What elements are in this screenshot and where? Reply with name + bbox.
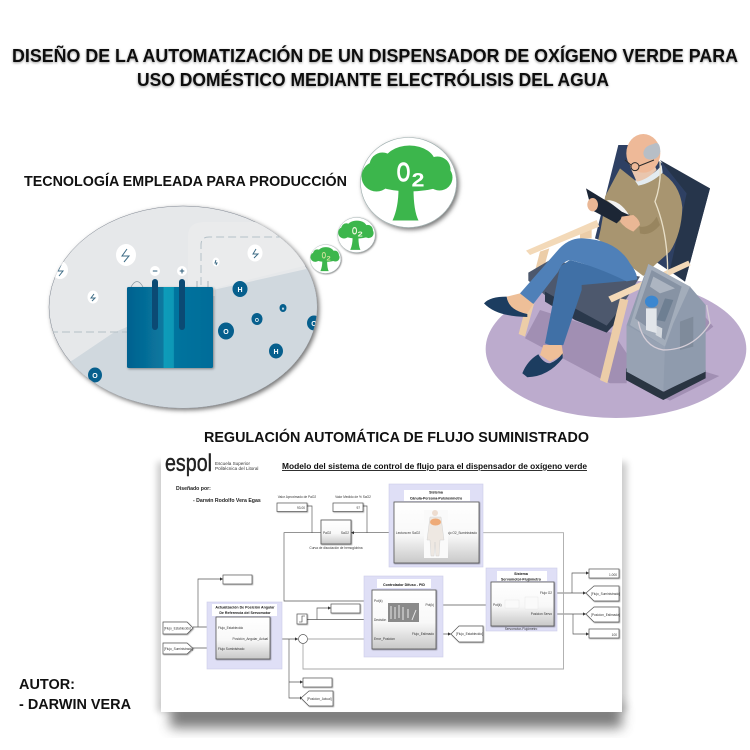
title (12, 45, 738, 90)
pants: upper leg (520, 238, 637, 304)
display blocks: 100 (612, 633, 617, 637)
from and goto tags: [Posicion_Estimada] (591, 613, 620, 617)
oxygen tube (655, 162, 668, 277)
icon: medium oxygen tree (338, 217, 375, 253)
feet (507, 293, 533, 313)
molecules: H (237, 287, 243, 294)
block: actualización de posición angular (207, 602, 282, 669)
lower background (70, 269, 317, 408)
block: actualización de posición angular: De Referencia del Servomotor (219, 611, 271, 615)
author: - DARWIN VERA (19, 697, 132, 713)
block: sistema servomotor-flujómetro: Pot(k) (493, 603, 502, 607)
block: actualización de posición angular: Posición_Angular_Actual (233, 637, 268, 641)
molecules: O (223, 329, 229, 336)
molecules (88, 281, 321, 382)
from and goto tags: [Flujo_Suministrado] (164, 647, 193, 651)
pants: lower leg (545, 260, 637, 346)
block: controlador difuso: Flujo_Estimado (412, 632, 434, 636)
block: actualización de posición angular: Actualización De Posición Angular (215, 606, 275, 610)
author: AUTOR: (19, 677, 75, 693)
far armrest and legs (580, 227, 592, 238)
purple floor (486, 280, 746, 418)
display blocks: Valor Medido de % SaO2 (335, 495, 371, 499)
arrowheads (213, 531, 589, 700)
from and goto tags: [Posicion_Actual] (307, 697, 332, 701)
logo: espol: espol (165, 450, 212, 477)
sweater arm shadow (639, 217, 660, 234)
author note: - Darwin Rodolfo Vera Egas (193, 498, 261, 504)
author (19, 677, 132, 713)
heading: tecnología: TECNOLOGÍA EMPLEADA PARA PRODUCCIÓN (24, 172, 347, 190)
display blocks: 97 (356, 506, 360, 510)
block: controlador difuso: Pot(k) (374, 599, 383, 603)
icon: small oxygen tree: 2 (326, 255, 331, 262)
from and goto tags: [Flujo_Establecido] (456, 632, 483, 636)
step source and sum (297, 614, 308, 644)
block: actualización de posición angular: Flujo Suministrado (218, 647, 245, 651)
shadow behind diagram (157, 462, 627, 728)
icon: human body (424, 510, 448, 558)
molecules: O (255, 318, 259, 324)
block: sistema servomotor-flujómetro: Sistema (514, 572, 529, 576)
block: curva de disociación: PaO2 (323, 531, 331, 535)
concentrator (626, 368, 706, 400)
icon: small oxygen tree: O (322, 251, 326, 261)
block: curva de disociación (309, 520, 363, 550)
block: actualización de posición angular: Flujo_Establecido (218, 626, 243, 630)
from and goto tags: [Flujo_Establecido] (164, 626, 191, 630)
block: controlador difuso: Error_Posicion (374, 637, 395, 641)
block: sistema cánula-persona-pulsioxímetro: Cánula-Persona-Pulsioxímetro (410, 496, 463, 500)
near armrest (608, 261, 691, 302)
block: sistema cánula-persona-pulsioxímetro: Flujo O2_Suministrado (445, 531, 477, 535)
molecules: H (282, 307, 285, 311)
from and goto tags: [Flujo_Suministrado] (591, 592, 620, 596)
block: curva de disociación: SaO2 (341, 531, 349, 535)
icon: large oxygen tree: 2 (412, 170, 424, 192)
from and goto tags (163, 586, 620, 706)
head and neck (635, 165, 663, 186)
icon: small oxygen tree (310, 245, 341, 273)
icon: large oxygen tree (360, 138, 456, 228)
display blocks: 93.00 (297, 506, 305, 510)
block: sistema cánula-persona-pulsioxímetro: Lectura en SaO2 (396, 531, 420, 535)
block: controlador difuso: Controlador Difuso - PID (383, 583, 425, 587)
author note: Diseñado por: (176, 486, 211, 492)
molecules: O (311, 321, 317, 328)
block: sistema cánula-persona-pulsioxímetro: Sistema (429, 490, 444, 494)
title: DISEÑO DE LA AUTOMATIZACIÓN DE UN DISPENSADOR DE OXÍGENO VERDE PARA (12, 45, 738, 66)
block: sistema servomotor-flujómetro: Servomotor-Flujómetro (505, 627, 538, 631)
glasses (625, 160, 654, 171)
heading: regulación: REGULACIÓN AUTOMÁTICA DE FLUJO SUMINISTRADO (204, 428, 589, 446)
display blocks (223, 495, 619, 687)
floor shadow (525, 310, 627, 383)
logo: espol (165, 450, 258, 477)
book and hands (586, 188, 630, 223)
block: controlador difuso: Decisión (374, 618, 386, 622)
sweater (598, 168, 682, 276)
icon: water tank: + (179, 266, 185, 276)
icon: medium oxygen tree: O (352, 226, 358, 238)
title: USO DOMÉSTICO MEDIANTE ELECTRÓLISIS DEL AGUA (137, 69, 609, 90)
diagram title: Modelo del sistema de control de flujo para el dispensador de oxígeno verde (282, 461, 587, 471)
icon: energy bolts (52, 244, 262, 304)
block: sistema servomotor-flujómetro (486, 568, 557, 631)
block: sistema cánula-persona-pulsioxímetro (389, 484, 483, 567)
logo: espol: Escuela Superior (215, 461, 250, 466)
block: sistema servomotor-flujómetro: Servomotor-Flujómetro (501, 578, 542, 582)
author note (176, 486, 261, 504)
icon: water tank (127, 266, 213, 368)
chair back (595, 145, 710, 282)
display blocks: 1.000 (609, 573, 617, 577)
seat (528, 260, 640, 327)
signal lines (193, 506, 589, 698)
block: sistema servomotor-flujómetro: Posicion Servo (531, 612, 552, 616)
logo: espol: Politécnica del Litoral (215, 466, 258, 471)
icon: water tank: − (152, 266, 158, 276)
panel: electrolysis ellipse (40, 206, 321, 420)
icon: medium oxygen tree: 2 (358, 230, 363, 239)
block: sistema servomotor-flujómetro: Flujo O2 (540, 591, 552, 595)
display blocks: Valor Aproximado de PaO2 (278, 495, 316, 499)
molecules: O (92, 373, 98, 380)
block: curva de disociación: Curva de disociación de hemoglobina (309, 546, 363, 550)
block: controlador difuso (364, 576, 443, 657)
block: controlador difuso: Pot(k) (425, 603, 434, 607)
illustration: elderly man reading with oxygen concentrator (484, 134, 746, 418)
panel: simulink control diagram (161, 450, 622, 712)
molecules: H (273, 349, 279, 356)
icon: large oxygen tree: O (396, 156, 410, 188)
